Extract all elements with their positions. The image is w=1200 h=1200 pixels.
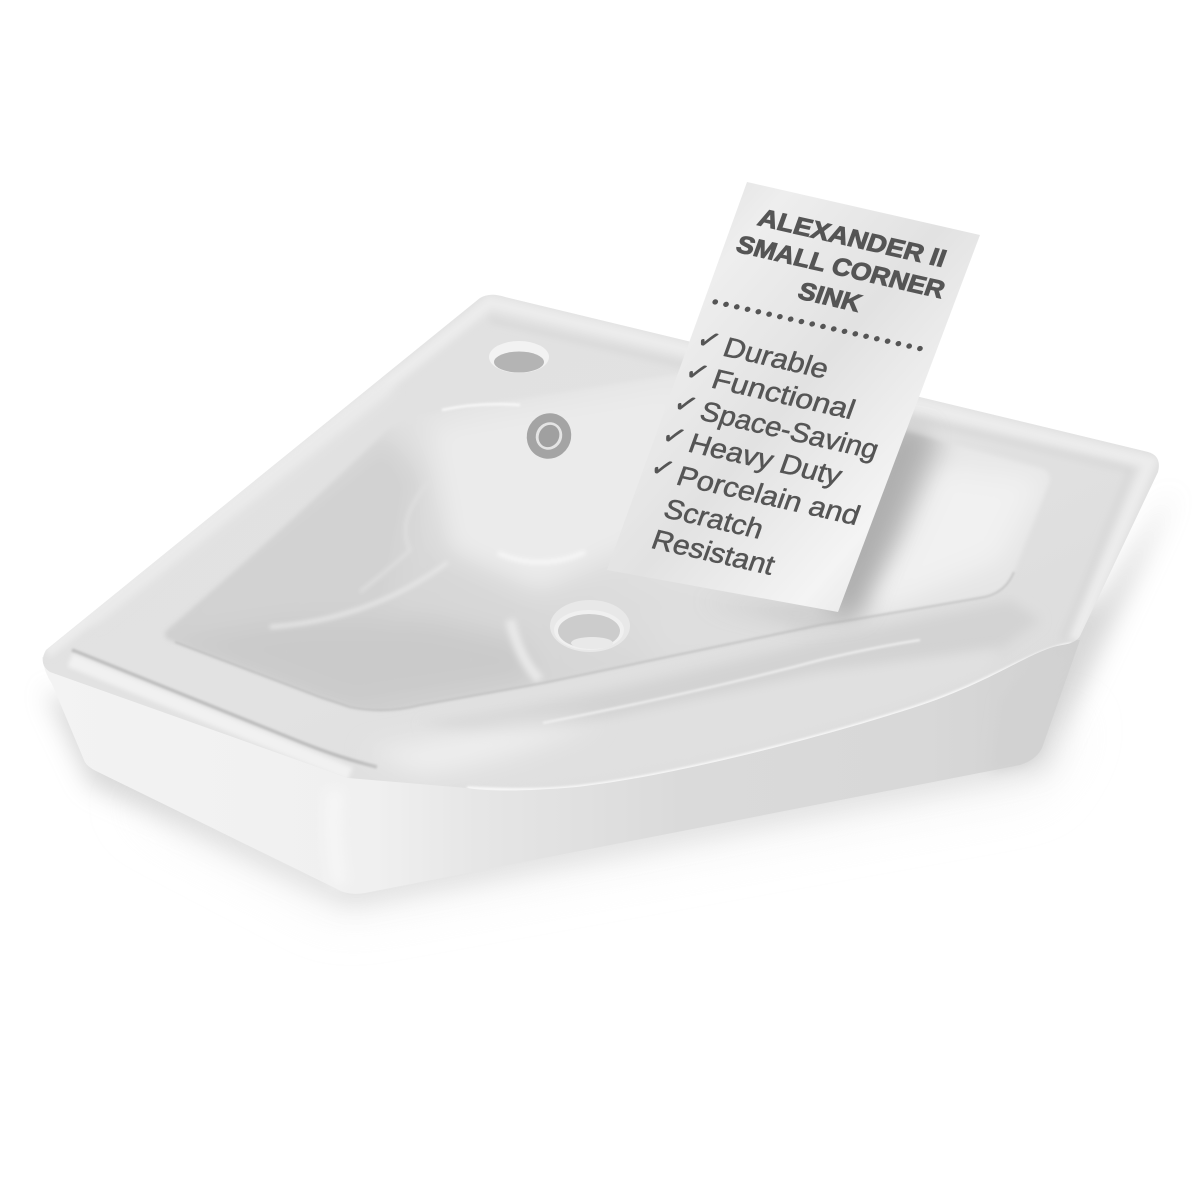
check marks: ✓: [670, 388, 702, 422]
rim groove: [72, 650, 377, 767]
check marks: ✓: [681, 356, 714, 390]
feature list: Resistant: [648, 524, 779, 581]
sink top deck and rim: [30, 280, 1170, 810]
drop shadow under sink: [45, 490, 1175, 915]
basin left shading: [345, 450, 406, 514]
check marks: ✓: [646, 451, 679, 486]
icon: overflow ring: [518, 405, 580, 467]
basin right wall light: [880, 480, 1014, 600]
front lip light patch: [400, 650, 1000, 785]
feature list: Durable: [719, 332, 833, 384]
icon: drain: [550, 600, 630, 652]
left deck light band: [90, 385, 390, 620]
card title: ALEXANDER II: [754, 204, 950, 273]
basin reflections: [498, 552, 585, 562]
product infographic: sink with feature card: [42, 182, 1160, 916]
basin back wall light: [440, 434, 626, 586]
check marks: ✓: [658, 419, 691, 454]
front edge highlight: [467, 644, 1072, 790]
feature list: Porcelain and: [673, 460, 865, 531]
front lip dark band: [460, 605, 1028, 726]
feature list: Scratch: [660, 493, 768, 545]
lip crease highlight: [543, 640, 920, 723]
feature list: [648, 331, 911, 595]
card title: SMALL CORNER: [733, 231, 949, 304]
check marks: ✓: [693, 324, 725, 358]
icon: faucet hole: [489, 341, 549, 373]
card title: [722, 202, 959, 334]
dotted divider: [715, 302, 920, 349]
feature list: Space-Saving: [696, 396, 883, 465]
feature card: [607, 182, 980, 612]
basin back highlight: [442, 404, 520, 410]
lower right basin: [800, 608, 835, 626]
check marks: [646, 324, 725, 486]
card title: SINK: [794, 277, 865, 318]
sink body front face: [42, 640, 1080, 894]
basin outline: [175, 572, 1014, 710]
basin: [166, 394, 1048, 709]
card shadow: [700, 430, 930, 620]
raised rim highlight: [46, 302, 1150, 652]
feature list: Functional: [708, 364, 860, 425]
feature list: Heavy Duty: [685, 428, 846, 491]
